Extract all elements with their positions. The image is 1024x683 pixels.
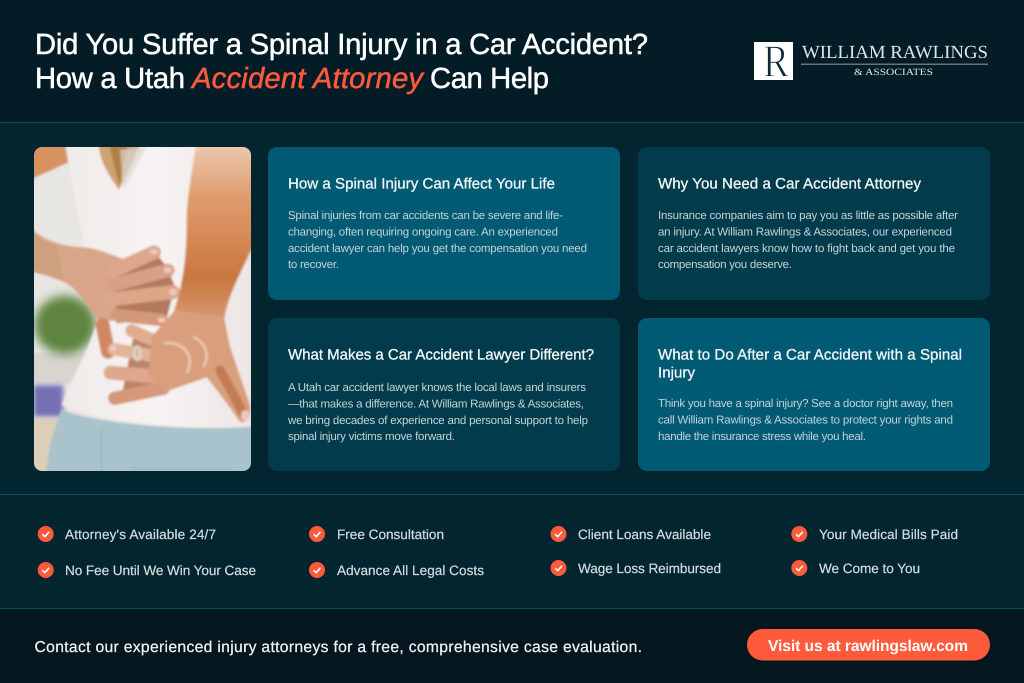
title: How a Utah — [35, 63, 185, 95]
text block: we bring decades of experience and personal support to help — [287, 415, 588, 427]
text block: A Utah car accident lawyer knows the local laws and insurers — [288, 382, 586, 394]
text block: car accident lawyers know how to fight back and get you the — [658, 243, 955, 255]
text block — [658, 398, 953, 443]
item: free consultation: Free Consultation — [337, 527, 444, 542]
panel: how a spinal injury can affect your life — [268, 147, 620, 300]
text block: Spinal injuries from car accidents can be severe and life- — [288, 210, 563, 222]
item: client loans: Client Loans Available — [578, 527, 711, 542]
item: we come to you: We Come to You — [819, 561, 920, 576]
heading: What Makes a Car Accident Lawyer Different? — [288, 347, 594, 364]
call to action text: Contact our experienced injury attorneys for a free, comprehensive case evaluation. — [34, 639, 642, 656]
photo: woman holding lower back — [30, 143, 257, 477]
logo: & ASSOCIATES — [854, 67, 933, 78]
text block: call William Rawlings & Associates to protect your rights and — [658, 414, 953, 426]
checklist — [38, 526, 958, 578]
text block: an injury. At William Rawlings & Associates, our experienced — [658, 226, 952, 238]
button: visit website — [747, 629, 990, 660]
item: wage loss: Wage Loss Reimbursed — [578, 561, 721, 576]
logo — [754, 36, 988, 86]
text block — [658, 210, 958, 271]
forearm and upper hand — [34, 230, 124, 322]
text block: to recover. — [288, 259, 339, 271]
text block — [287, 382, 588, 443]
text block — [288, 210, 587, 271]
item: attorneys available: Attorney's Available 24/7 — [65, 527, 216, 542]
heading: How a Spinal Injury Can Affect Your Life — [288, 176, 555, 193]
title — [35, 29, 648, 95]
footer band — [0, 609, 1024, 683]
heading: Why You Need a Car Accident Attorney — [658, 176, 921, 193]
text block: —that makes a difference. At William Rawlings & Associates, — [288, 398, 584, 410]
lower hand back and thumb — [148, 310, 250, 422]
title: Can Help — [430, 63, 549, 95]
item: advance costs: Advance All Legal Costs — [337, 563, 484, 578]
panel: why you need a car accident attorney — [638, 147, 990, 300]
text block: handle the insurance stress while you heal. — [658, 431, 866, 443]
item: medical bills: Your Medical Bills Paid — [819, 527, 958, 542]
logo: WILLIAM RAWLINGS — [802, 43, 988, 63]
item: no fee: No Fee Until We Win Your Case — [65, 563, 256, 578]
panel: what makes a car accident lawyer different — [268, 318, 620, 471]
button: visit website: Visit us at rawlingslaw.com — [768, 638, 968, 655]
heading: What to Do After a Car Accident with a Spinal — [658, 347, 962, 364]
heading: Injury — [658, 365, 695, 382]
text block: Think you have a spinal injury? See a doctor right away, then — [658, 398, 953, 410]
text block: spinal injury victims move forward. — [288, 431, 455, 443]
middle band — [0, 122, 1024, 495]
benefits band — [0, 495, 1024, 609]
title: Accident Attorney — [190, 63, 425, 95]
text block: changing, often requiring ongoing care. An experienced — [288, 226, 558, 238]
text block: Insurance companies aim to pay you as little as possible after — [658, 210, 958, 222]
title: Did You Suffer a Spinal Injury in a Car Accident? — [35, 29, 648, 61]
panel: what to do after a car accident — [638, 318, 990, 471]
header band — [0, 0, 1024, 122]
text block: compensation you deserve. — [658, 259, 792, 271]
icon: R monogram: R — [763, 36, 789, 86]
text block: accident lawyer can help you get the compensation you need — [288, 243, 587, 255]
heading — [658, 347, 962, 382]
